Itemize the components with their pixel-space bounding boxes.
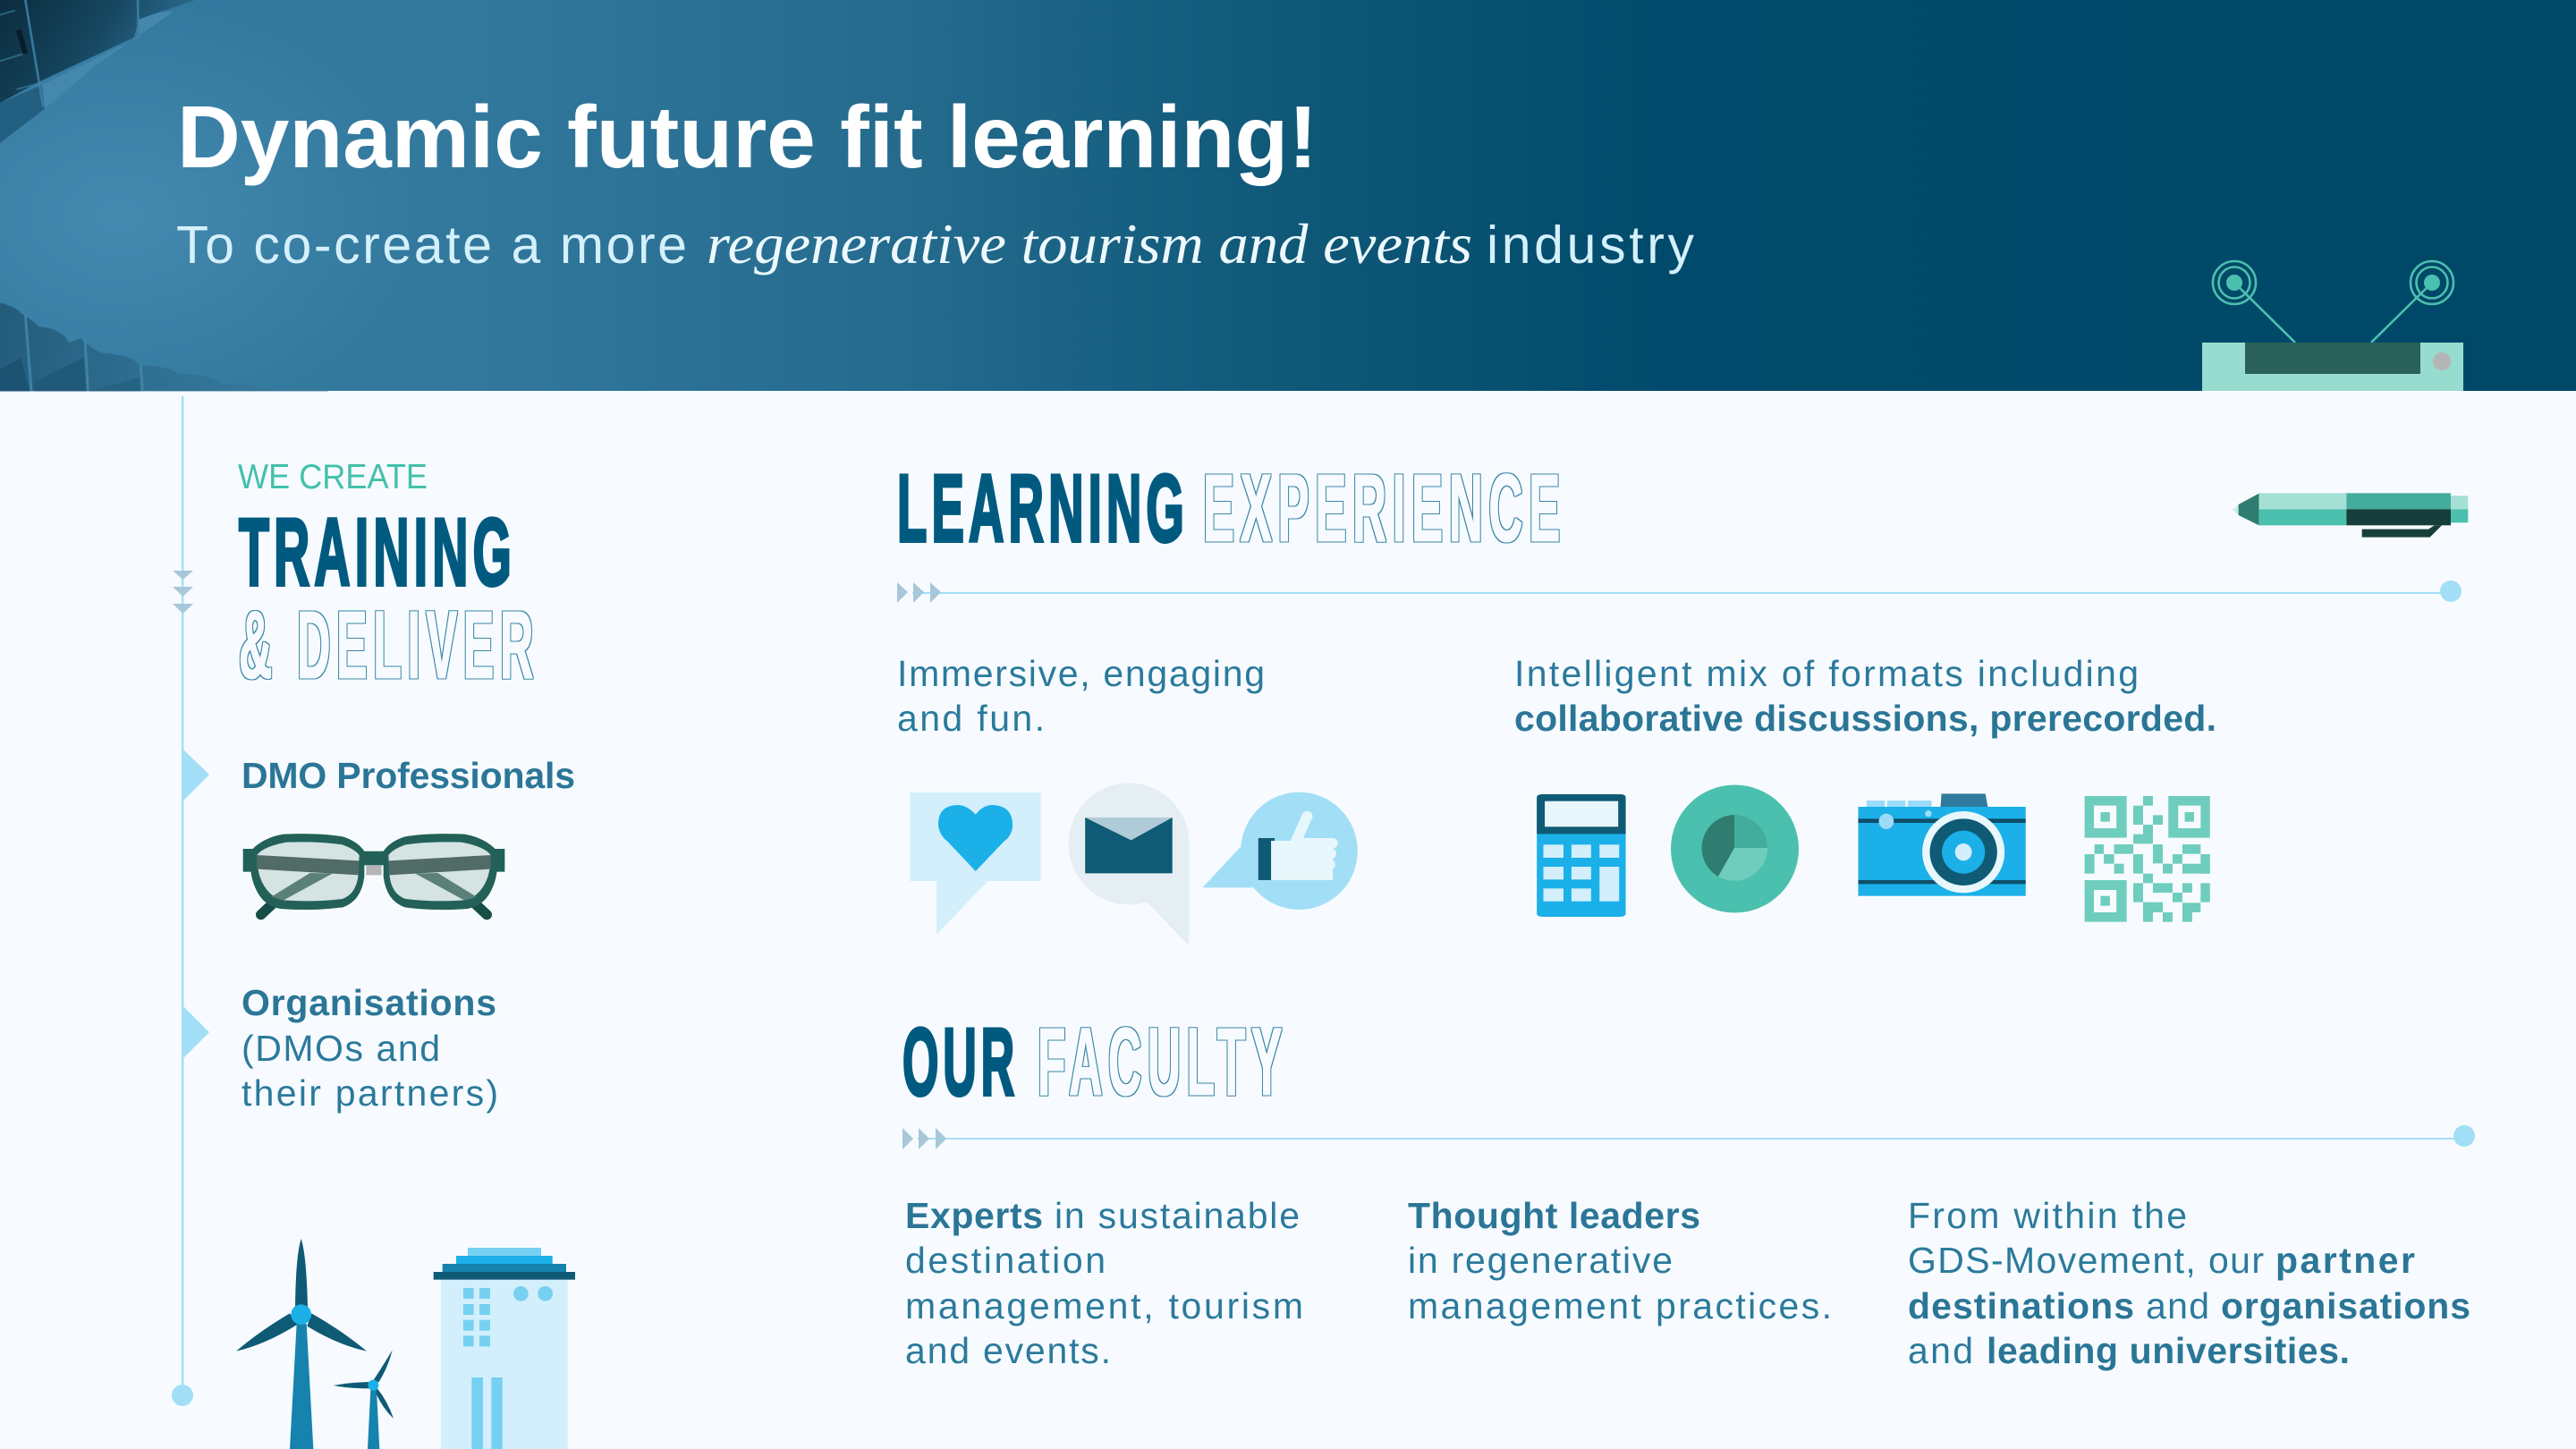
text: intelligent mix	[1514, 653, 2216, 739]
text: from within: organisations	[2221, 1285, 2470, 1326]
text: from within: From within the	[1908, 1195, 2187, 1236]
text: immersive: Immersive, engaging	[897, 653, 1265, 694]
timeline marker: DMO professionals	[182, 749, 209, 801]
subtitle	[176, 213, 1694, 275]
icon: building	[434, 1248, 575, 1449]
text: immersive: and fun.	[897, 698, 1045, 739]
eyebrow text: WE CREATE	[238, 458, 428, 496]
divider arrows row two	[902, 1125, 2475, 1149]
text: from within	[1908, 1195, 2470, 1371]
label: organisations: (DMOs and	[242, 1028, 440, 1069]
icon: QR code	[2085, 796, 2210, 922]
heading: our faculty	[902, 1007, 1288, 1115]
text: experts: management, tourism	[905, 1285, 1303, 1326]
icon: wind turbines	[236, 1239, 394, 1449]
icon: pie chart	[1671, 785, 1799, 912]
subtitle: industry	[1487, 216, 1694, 275]
text: intelligent mix: collaborative discussions, prerecorded.	[1514, 698, 2216, 739]
text: from within: and	[2146, 1285, 2209, 1326]
label: organisations: their partners)	[242, 1072, 498, 1114]
icon: calculator	[1537, 794, 1626, 917]
left timeline	[172, 396, 209, 1406]
icon: thumbs up speech bubble	[1202, 792, 1358, 910]
panel: learning experience	[897, 453, 2468, 945]
text: thought leaders: in regenerative	[1408, 1240, 1673, 1281]
text: thought leaders	[1408, 1195, 1832, 1326]
subtitle: To co-create a more	[176, 216, 687, 275]
icon: glasses	[243, 834, 504, 915]
icon: mail speech bubble	[1069, 783, 1190, 945]
text: experts: Experts	[905, 1195, 1043, 1236]
icon: heart speech bubble	[910, 792, 1041, 935]
icon: signal device	[2202, 261, 2463, 391]
text: intelligent mix: Intelligent mix of formats including	[1514, 653, 2139, 694]
timeline down arrows	[173, 571, 193, 614]
text: from within: GDS-Movement, our	[1908, 1240, 2264, 1281]
panel: our faculty: FACULTY	[1038, 1007, 1288, 1115]
icon: camera	[1858, 793, 2026, 896]
label: organisations	[242, 982, 498, 1114]
text: experts	[905, 1195, 1303, 1371]
timeline marker: organisations	[182, 1005, 209, 1059]
text: from within: and	[1908, 1330, 1973, 1371]
panel: our faculty	[902, 1007, 2475, 1371]
divider arrows row one	[897, 580, 2462, 603]
text: experts: and events.	[905, 1330, 1111, 1371]
heading: learning experience: LEARNING	[897, 454, 1189, 562]
text: thought leaders: Thought leaders	[1408, 1195, 1700, 1236]
text: thought leaders: management practices.	[1408, 1285, 1832, 1326]
panel: we create: & DELIVER	[239, 590, 539, 699]
text: from within: destinations	[1908, 1285, 2134, 1326]
text: from within: leading universities.	[1987, 1330, 2350, 1371]
panel: we create	[236, 458, 575, 1449]
text: from within: partner	[2275, 1240, 2415, 1281]
header photo texture: bottom-left scallops	[0, 302, 328, 391]
text: experts: destination	[905, 1240, 1106, 1281]
text: immersive	[897, 653, 1265, 739]
label: organisations: Organisations	[242, 982, 496, 1023]
icon: pen	[2233, 493, 2468, 538]
panel: learning experience: EXPERIENCE	[1203, 453, 1566, 562]
text: experts: in sustainable	[1055, 1195, 1300, 1236]
label: DMO professionals: DMO Professionals	[242, 755, 575, 796]
subtitle: regenerative tourism and events	[707, 213, 1472, 275]
header banner	[0, 0, 2576, 391]
heading: training: TRAINING	[239, 498, 516, 606]
heading: our faculty: OUR	[902, 1008, 1019, 1115]
header photo texture: top-left roof panels	[0, 0, 195, 143]
title: Dynamic future fit learning!	[177, 88, 1318, 186]
